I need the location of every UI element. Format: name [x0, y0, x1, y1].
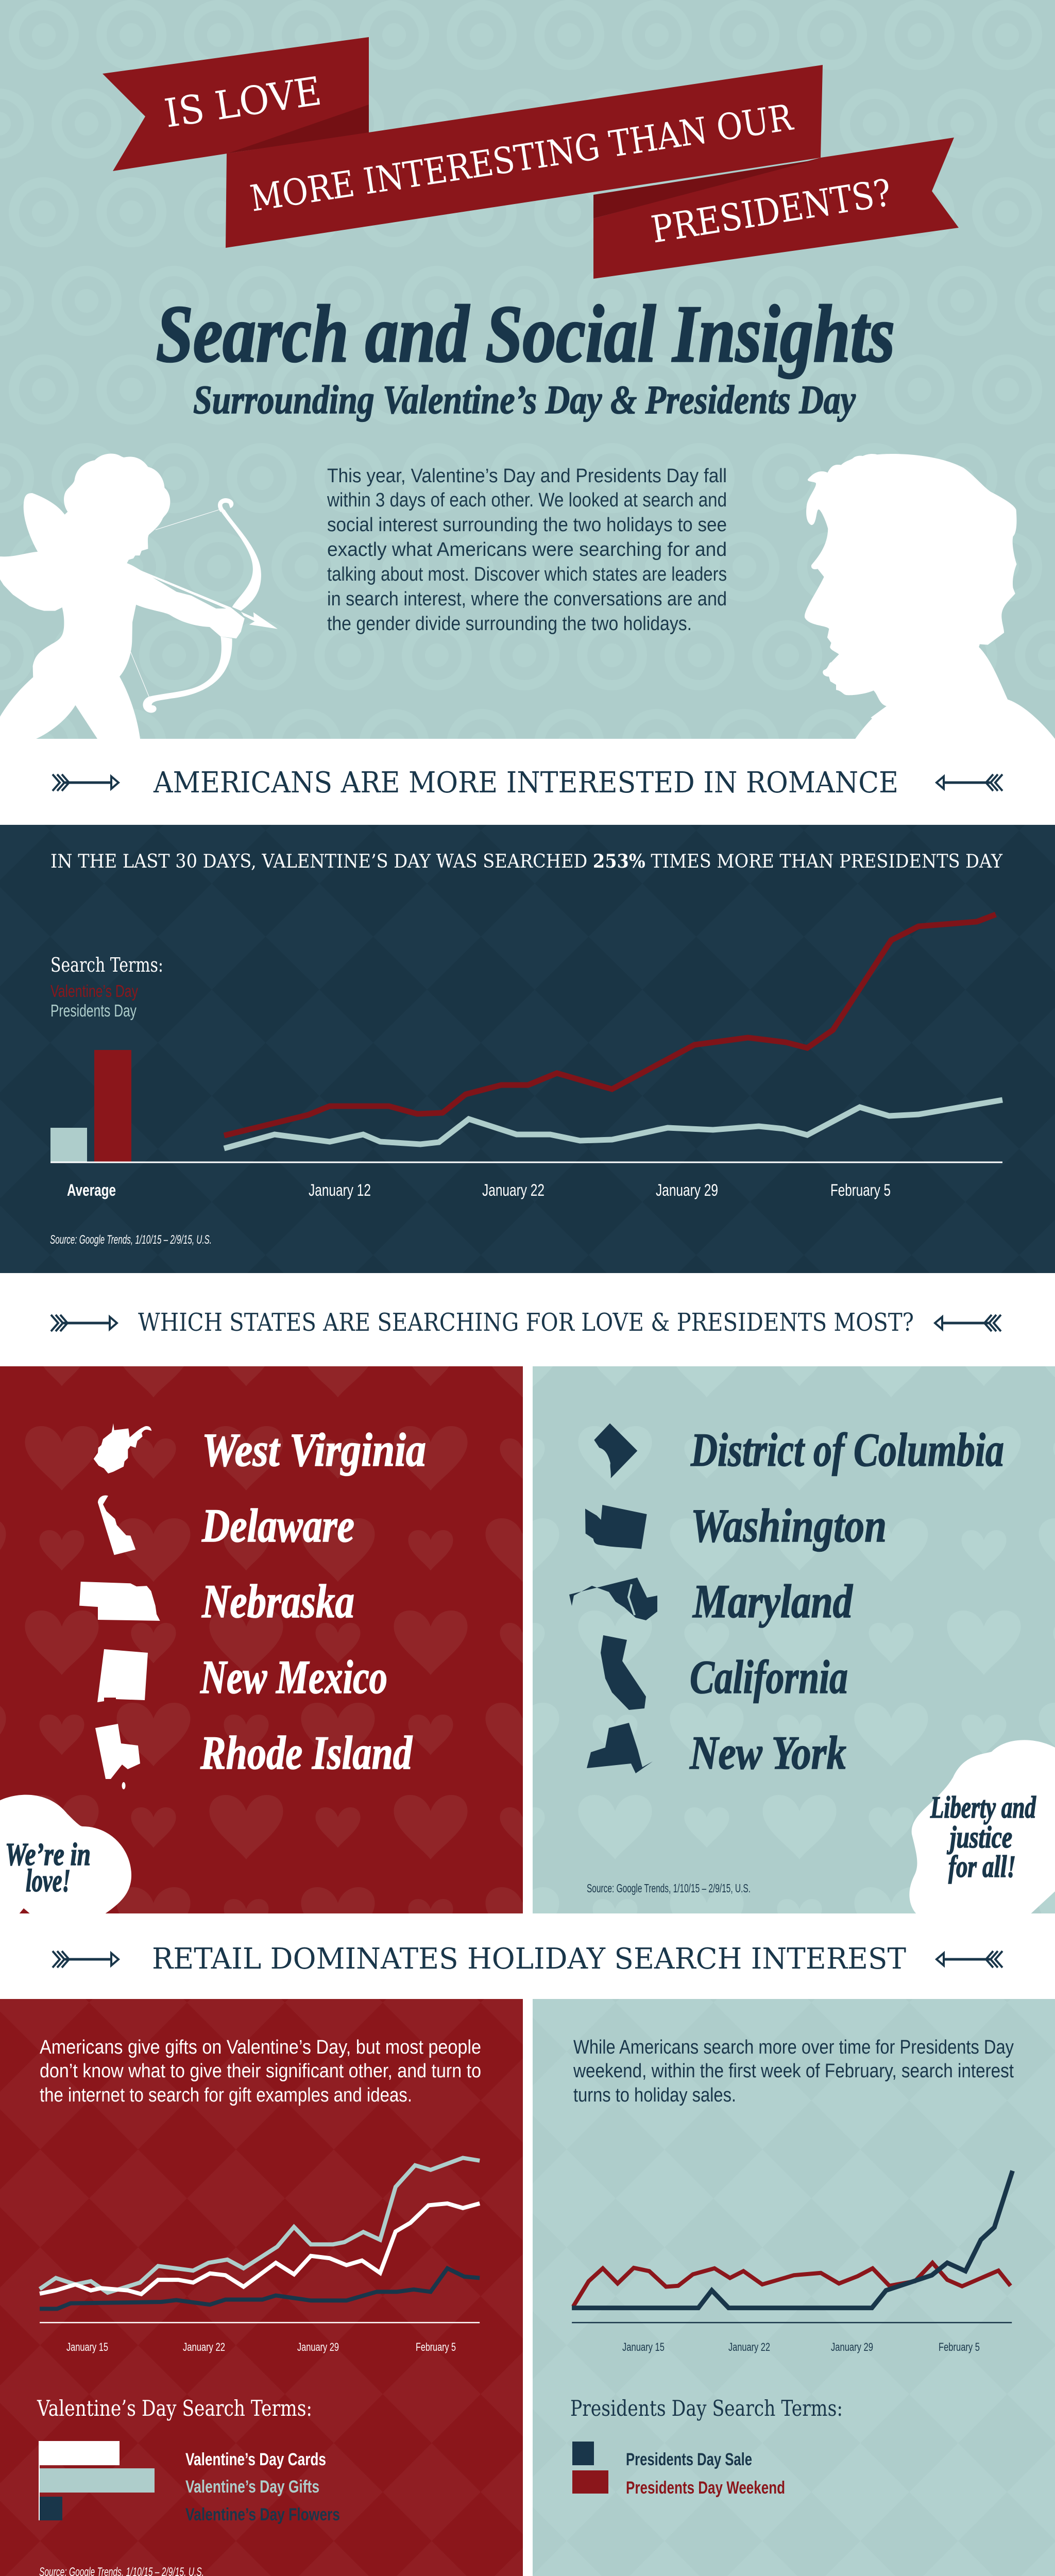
arrow: left	[53, 774, 118, 791]
panel: president states	[533, 1366, 1055, 1917]
legend labels	[185, 2450, 340, 2524]
legend labels: Valentine’s Day Cards	[185, 2450, 326, 2469]
callout: liberty and justice: justice	[947, 1820, 1012, 1854]
ribbon: fold shadow two	[593, 160, 816, 218]
axis labels: January 12	[309, 1181, 371, 1199]
subtitle: Surrounding Valentine’s Day & Presidents Day	[193, 377, 856, 422]
label: west virginia: West Virginia	[202, 1423, 426, 1476]
axis labels	[67, 1181, 891, 1199]
legend labels: Valentine’s Day Gifts	[185, 2477, 319, 2497]
intro text block: within 3 days of each other. We looked at search and	[327, 489, 727, 511]
panel: hero background	[0, 0, 1055, 739]
bar: valentine's average	[94, 1050, 131, 1162]
axis labels: Average	[67, 1181, 116, 1199]
panel: valentine states	[0, 1366, 523, 1917]
arrow: right	[935, 1315, 1001, 1331]
line: valentine's day trend	[224, 914, 996, 1136]
panel: search comparison chart	[0, 825, 1055, 1273]
label: new york: New York	[689, 1726, 846, 1779]
label: rhode island: Rhode Island	[200, 1726, 413, 1779]
label: washington: Washington	[691, 1499, 887, 1552]
intro text block	[327, 465, 727, 635]
ribbon text: more interesting than our: MORE INTERESTING THAN OUR	[247, 96, 796, 220]
source: Source: Google Trends, 1/10/15 – 2/9/15, U.S.	[50, 1233, 212, 1247]
line: presidents day trend	[224, 1100, 1002, 1148]
icon: maryland	[569, 1578, 657, 1620]
axis labels: January 15	[622, 2341, 665, 2353]
legend labels: Presidents Day Sale	[626, 2450, 752, 2469]
panel: presidents retail	[533, 1999, 1055, 2576]
heading text: RETAIL DOMINATES HOLIDAY SEARCH INTEREST	[152, 1942, 906, 1976]
text block: turns to holiday sales.	[573, 2084, 736, 2106]
axis labels: February 5	[830, 1181, 891, 1199]
arrow: right	[937, 1951, 1002, 1968]
axis labels	[622, 2341, 980, 2353]
ribbon: middle segment	[226, 65, 823, 248]
ribbon: fold shadow one	[229, 105, 369, 153]
intro text block: in search interest, where the conversations are and	[327, 588, 727, 610]
ribbon banner	[103, 37, 959, 279]
axis labels: January 15	[66, 2341, 108, 2353]
axis labels: February 5	[939, 2341, 980, 2353]
panel: valentine retail	[0, 1999, 523, 2576]
arrow: left	[51, 1315, 117, 1331]
ribbon: first segment	[103, 37, 369, 171]
icon: delaware	[98, 1495, 135, 1555]
text block: the internet to search for gift examples and ideas.	[40, 2084, 412, 2106]
icon: washington	[585, 1505, 647, 1549]
ribbon: third segment	[593, 138, 959, 279]
icon: nebraska	[79, 1582, 160, 1621]
legend title: Search Terms:	[50, 954, 163, 976]
axis labels: January 22	[183, 2341, 225, 2353]
legend: presidents day: Presidents Day	[50, 1001, 137, 1020]
panel headline: IN THE LAST 30 DAYS, VALENTINE’S DAY WAS SEARCHED 253% TIMES MORE THAN PRESIDENTS DAY	[50, 851, 1003, 872]
bars legend	[572, 2442, 608, 2494]
callout: we're in love	[0, 1795, 131, 1917]
legend labels	[626, 2450, 785, 2498]
icon: president silhouette	[805, 454, 1055, 739]
axis labels: January 29	[656, 1181, 718, 1199]
intro text block: social interest surrounding the two holidays to see	[327, 514, 727, 536]
legend labels: Presidents Day Weekend	[626, 2478, 785, 2498]
axis labels: January 29	[831, 2341, 873, 2353]
line chart: presidents search terms	[572, 2171, 1013, 2323]
legend: valentine's day: Valentine’s Day	[50, 981, 138, 1001]
intro text block: the gender divide surrounding the two holidays.	[327, 613, 692, 635]
arrow: right	[937, 774, 1002, 791]
axis labels	[66, 2341, 456, 2353]
ribbon text: presidents: PRESIDENTS?	[649, 171, 894, 251]
section heading: romance	[53, 766, 1002, 800]
icon: new mexico	[97, 1649, 148, 1702]
callout: liberty and justice: for all!	[948, 1850, 1016, 1884]
icon: west virginia	[94, 1423, 151, 1473]
icon: california	[601, 1635, 646, 1710]
text block: don’t know what to give their significant other, and turn to	[40, 2060, 481, 2082]
label: new mexico: New Mexico	[200, 1651, 387, 1703]
legend title: Presidents Day Search Terms:	[570, 2396, 843, 2421]
icon: cupid silhouette	[0, 453, 278, 739]
ribbon text: is love: IS LOVE	[162, 68, 324, 137]
label: maryland: Maryland	[692, 1575, 854, 1628]
heading text: AMERICANS ARE MORE INTERESTED IN ROMANCE	[153, 766, 898, 800]
intro text block: This year, Valentine’s Day and Presidents Day fall	[327, 465, 727, 487]
line chart: valentine search terms	[40, 2158, 480, 2323]
legend labels: Valentine’s Day Flowers	[185, 2505, 340, 2524]
axis labels: January 22	[728, 2341, 770, 2353]
intro text block: talking about most. Discover which states are leaders	[327, 564, 727, 585]
text block: Americans give gifts on Valentine’s Day, but most people	[40, 2037, 481, 2058]
source: Source: Google Trends, 1/10/15 – 2/9/15, U.S.	[587, 1882, 751, 1895]
callout: liberty and justice	[909, 1740, 1055, 1917]
label: delaware: Delaware	[201, 1499, 354, 1552]
callout: we're in love: We’re in	[5, 1837, 91, 1872]
icon: new york	[587, 1723, 653, 1773]
title: Search and Social Insights	[156, 289, 895, 379]
callout: we're in love: love!	[26, 1863, 71, 1899]
legend title: Valentine’s Day Search Terms:	[37, 2396, 312, 2421]
text block	[40, 2037, 481, 2106]
heading text: WHICH STATES ARE SEARCHING FOR LOVE & PRESIDENTS MOST?	[138, 1308, 914, 1337]
icon: district of columbia	[594, 1423, 637, 1478]
icon: rhode island	[95, 1724, 140, 1789]
bars legend	[39, 2441, 155, 2520]
text block	[573, 2037, 1014, 2106]
axis labels: January 22	[482, 1181, 544, 1199]
section heading: states	[51, 1308, 1001, 1337]
intro text block: exactly what Americans were searching for and	[327, 539, 727, 561]
axis labels: January 29	[297, 2341, 339, 2353]
bar: presidents average	[50, 1128, 87, 1162]
arrow: left	[53, 1951, 118, 1968]
section heading: retail	[53, 1942, 1002, 1976]
label: nebraska: Nebraska	[201, 1575, 354, 1628]
label: california: California	[690, 1651, 848, 1703]
axis labels: February 5	[416, 2341, 456, 2353]
